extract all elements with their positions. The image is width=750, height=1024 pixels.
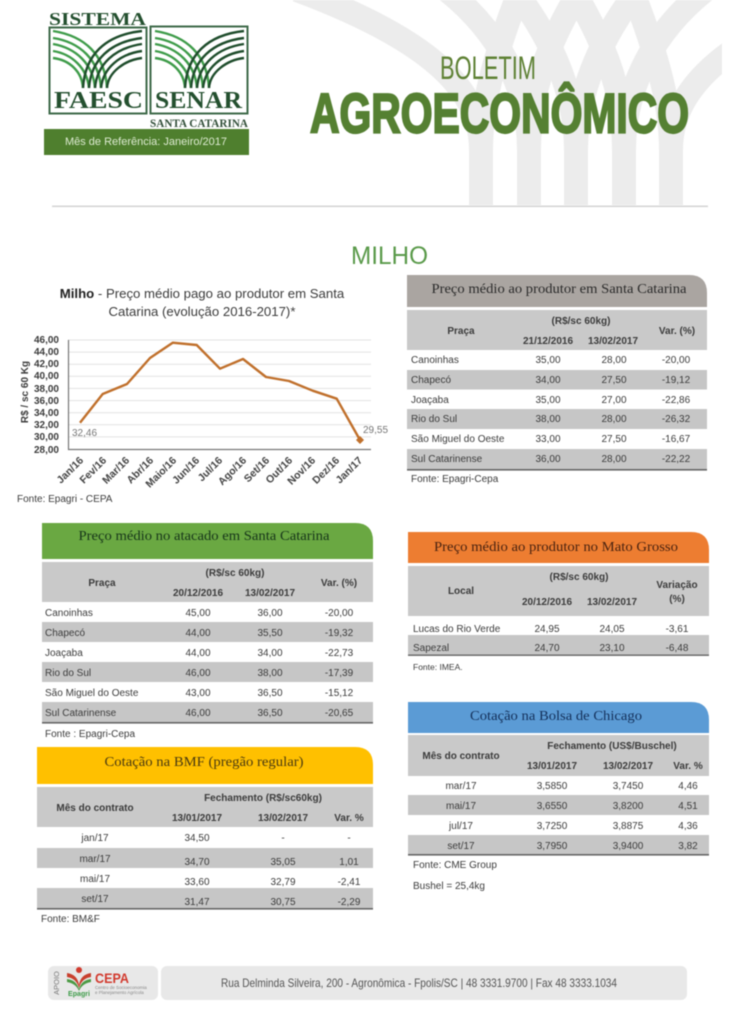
table rows: 31,47	[184, 897, 210, 908]
table rows: 36,00	[535, 454, 561, 465]
panel: Preço médio no atacado em Santa Catarina	[42, 523, 373, 740]
table rows: São Miguel do Oeste	[411, 434, 505, 445]
table rows: -16,67	[662, 434, 691, 445]
table head row: 13/02/2017	[603, 761, 653, 772]
table heading	[42, 523, 373, 559]
panel: Cotação na BMF	[37, 747, 373, 925]
table rows: 1,01	[339, 857, 359, 868]
table head row: Mês do contrato	[422, 751, 500, 762]
table rows: 3,6550	[537, 801, 568, 812]
icon: Epagri mark	[67, 967, 91, 991]
chart source: Fonte: Epagri - CEPA	[17, 494, 113, 505]
table head row: Fechamento (R$/sc60kg)	[204, 793, 322, 804]
table rows: -	[347, 833, 351, 844]
table rows: 4,51	[678, 801, 698, 812]
footer logo panel: CEPA	[95, 970, 129, 986]
table rows: 27,50	[601, 375, 627, 386]
panel: Preço médio ao produtor em Santa Catarina	[407, 275, 707, 485]
table rows: Joaçaba	[45, 648, 83, 659]
table head row: Var. (%)	[321, 578, 357, 589]
table rows: 43,00	[185, 688, 211, 699]
table rows: 34,50	[184, 833, 210, 844]
y axis labels: 42,00	[34, 359, 59, 370]
logo: Sistema FAESC SENAR	[49, 9, 249, 130]
x axis labels: Jun/16	[170, 455, 202, 487]
table heading	[408, 702, 709, 733]
table rows: 38,00	[257, 668, 283, 679]
table rows: 23,10	[599, 643, 625, 654]
table rows: -15,12	[325, 688, 354, 699]
x axis labels: Abr/16	[125, 455, 156, 486]
chart title: Milho - Preço médio pago ao produtor em Santa	[60, 286, 345, 301]
x axis labels: Ago/16	[216, 455, 249, 488]
x axis labels: Fev/16	[78, 455, 109, 486]
y axis labels	[34, 335, 59, 456]
table rows: 24,05	[599, 624, 625, 635]
footer logo panel: e Planejamento Agrícola	[95, 990, 144, 995]
table rows: 35,00	[535, 355, 561, 366]
table rows: Joaçaba	[411, 395, 449, 406]
y axis labels: 46,00	[34, 335, 59, 346]
footer logo panel: Centro de Socioeconomia	[95, 985, 147, 990]
data labels: 32,46	[72, 428, 97, 439]
table rows: set/17	[447, 841, 475, 852]
table head row: 21/12/2016	[523, 336, 573, 347]
table rows: Rio do Sul	[411, 414, 457, 425]
data labels	[72, 425, 388, 439]
table head row: (R$/sc 60kg)	[206, 568, 264, 579]
logo box: SENAR	[150, 26, 248, 114]
table rows	[408, 624, 709, 656]
table head row: 13/02/2017	[258, 813, 308, 824]
reference month bar: Mês de Referência: Janeiro/2017	[65, 136, 227, 148]
table rows	[407, 355, 707, 471]
table rows: set/17	[81, 894, 109, 905]
logo box: FAESC	[50, 28, 146, 114]
table rows: 36,00	[257, 608, 283, 619]
y axis labels: 32,00	[34, 420, 59, 431]
x axis labels: Set/16	[242, 455, 272, 485]
table rows: 44,00	[185, 628, 211, 639]
table rows: São Miguel do Oeste	[45, 688, 139, 699]
table rows: -26,32	[662, 414, 691, 425]
table rows: mar/17	[79, 854, 111, 865]
table rows: 3,8200	[613, 801, 644, 812]
bushel note: Bushel = 25,4kg	[413, 881, 485, 892]
table head row: Var. (%)	[659, 326, 695, 337]
table head row: Fechamento (US$/Buschel)	[547, 741, 677, 752]
table head row: 20/12/2016	[173, 588, 223, 599]
table heading	[408, 532, 709, 563]
table rows: 24,95	[534, 624, 560, 635]
table rows: 28,00	[601, 414, 627, 425]
table rows: Canoinhas	[45, 608, 93, 619]
x axis labels: Jan/17	[334, 455, 365, 486]
table head row: Mês do contrato	[56, 803, 134, 814]
logo box: SENAR: SENAR	[155, 88, 243, 114]
table rows: Rio do Sul	[45, 668, 91, 679]
table rows: 45,00	[185, 608, 211, 619]
table rows: -19,32	[325, 628, 354, 639]
table heading: Preço médio ao produtor em Santa Catarina	[432, 282, 687, 297]
footer address panel: Rua Delminda Silveira, 200 - Agronômica - Fpolis/SC | 48 3331.9700 | Fax 48 3333.1034	[221, 976, 617, 990]
table head row: Local	[448, 586, 474, 597]
table rows	[408, 781, 709, 856]
y axis labels: 40,00	[34, 371, 59, 382]
x axis labels: Jul/16	[196, 455, 225, 484]
end marker	[356, 436, 364, 444]
table rows: 3,7250	[537, 821, 568, 832]
table rows: Chapecó	[411, 375, 451, 386]
table rows: mai/17	[446, 801, 476, 812]
table rows: 35,50	[257, 628, 283, 639]
table head row	[407, 310, 707, 350]
table rows: mar/17	[445, 781, 477, 792]
table rows	[37, 833, 373, 910]
table rows: -20,00	[325, 608, 354, 619]
chart title	[60, 286, 345, 319]
table rows: 34,70	[184, 857, 210, 868]
x axis labels: Dez/16	[310, 455, 342, 487]
table heading: Cotação na BMF (pregão regular)	[104, 755, 304, 770]
footer	[48, 966, 687, 1000]
data labels: 29,55	[363, 425, 388, 436]
table rows: mai/17	[80, 874, 110, 885]
table head row: 13/02/2017	[588, 336, 638, 347]
table rows: 27,50	[601, 434, 627, 445]
table head row: (R$/sc 60kg)	[552, 316, 610, 327]
table rows: jan/17	[80, 833, 109, 844]
chart title: Catarina (evolução 2016-2017)*	[109, 304, 295, 319]
table rows: -22,86	[662, 395, 691, 406]
y axis title: R$ / sc 60 Kg	[20, 361, 31, 423]
table rows	[42, 608, 373, 724]
table source: Fonte: BM&F	[41, 914, 100, 925]
footer address panel	[161, 966, 687, 1000]
table head row: 20/12/2016	[522, 597, 572, 608]
table head row: Var. %	[334, 813, 364, 824]
table rows: 44,00	[185, 648, 211, 659]
table rows: Sul Catarinense	[45, 708, 117, 719]
price line	[80, 343, 360, 440]
table head row: 13/02/2017	[245, 588, 295, 599]
y axis labels: 36,00	[34, 396, 59, 407]
table rows: -22,73	[325, 648, 354, 659]
table rows: 35,00	[535, 395, 561, 406]
table rows: 4,36	[678, 821, 698, 832]
table head row: 13/01/2017	[172, 813, 222, 824]
footer logo panel: Epagri	[68, 991, 90, 998]
table rows: 3,9400	[613, 841, 644, 852]
table rows: -19,12	[662, 375, 691, 386]
table head row: Variação	[656, 580, 698, 591]
x axis labels	[55, 455, 365, 490]
table rows: 34,00	[257, 648, 283, 659]
table rows: -17,39	[325, 668, 354, 679]
footer logo panel: APOIO	[52, 971, 61, 995]
footer logo panel	[48, 966, 158, 1000]
table rows: 30,75	[270, 897, 296, 908]
table rows: 3,82	[678, 841, 698, 852]
x axis labels: Mar/16	[100, 455, 132, 487]
x axis labels: Jan/16	[55, 455, 86, 486]
y axis labels: 44,00	[34, 347, 59, 358]
table head row: (R$/sc 60kg)	[550, 572, 608, 583]
table rows: 3,5850	[537, 781, 568, 792]
table rows: 28,00	[601, 355, 627, 366]
reference month bar	[44, 129, 249, 155]
table rows: 33,60	[184, 877, 210, 888]
table heading	[37, 747, 373, 784]
table head row	[37, 787, 373, 827]
table rows: 32,79	[270, 877, 296, 888]
panel: line chart of corn price	[17, 286, 388, 505]
table heading	[407, 275, 707, 307]
table heading: Preço médio ao produtor no Mato Grosso	[434, 540, 678, 555]
table rows: 27,00	[601, 395, 627, 406]
x axis labels: Out/16	[264, 455, 295, 486]
x axis labels: Nov/16	[285, 455, 318, 487]
table rows: Sapezal	[413, 643, 449, 654]
table rows: 36,50	[257, 708, 283, 719]
table source: Fonte: Epagri-Cepa	[411, 474, 499, 485]
table rows: 35,05	[270, 857, 296, 868]
table head row	[408, 735, 709, 776]
table rows: 3,8875	[613, 821, 644, 832]
table rows: 38,00	[535, 414, 561, 425]
logo text: Santa Catarina: SANTA CATARINA	[150, 118, 249, 130]
table head row: Var. %	[673, 761, 703, 772]
table source: Fonte : Epagri-Cepa	[45, 729, 135, 740]
table head row: 13/02/2017	[587, 597, 637, 608]
table rows: -2,29	[338, 897, 361, 908]
table head row: Praça	[447, 326, 475, 337]
table rows: 33,00	[535, 434, 561, 445]
table rows: 4,46	[678, 781, 698, 792]
table head row: 13/01/2017	[527, 761, 577, 772]
y axis labels: 34,00	[34, 408, 59, 419]
table head row	[408, 566, 709, 616]
table rows: -6,48	[666, 643, 689, 654]
table rows: 46,00	[185, 668, 211, 679]
table heading: Cotação na Bolsa de Chicago	[470, 709, 642, 724]
table heading: Preço médio no atacado em Santa Catarina	[78, 529, 330, 544]
table rows: -2,41	[338, 877, 361, 888]
table head row: (%)	[669, 594, 685, 605]
table rows: -3,61	[666, 624, 689, 635]
table rows: Lucas do Rio Verde	[413, 624, 501, 635]
table rows: -	[281, 833, 285, 844]
table head row	[42, 562, 373, 602]
title: Boletim: BOLETIM	[440, 50, 536, 86]
heading: Milho: MILHO	[351, 242, 428, 270]
y axis labels: 30,00	[34, 432, 59, 443]
table rows: 3,7450	[613, 781, 644, 792]
table source: Fonte: IMEA.	[413, 662, 463, 672]
logo box: FAESC: FAESC	[54, 88, 143, 114]
table head row: Praça	[88, 578, 116, 589]
table rows: jul/17	[448, 821, 473, 832]
table rows: Canoinhas	[411, 355, 459, 366]
y axis labels: 38,00	[34, 384, 59, 395]
table rows: -20,65	[325, 708, 354, 719]
y axis labels: 28,00	[34, 445, 59, 456]
panel: Cotação na Bolsa de Chicago	[408, 702, 709, 892]
watermark: leaf pattern	[297, 0, 750, 205]
table rows: 3,7950	[537, 841, 568, 852]
logo text: Sistema: SISTEMA	[49, 9, 146, 29]
panel: Preço médio ao produtor no Mato Grosso	[408, 532, 709, 672]
table source: Fonte: CME Group	[413, 860, 497, 871]
table rows: -22,22	[662, 454, 691, 465]
table rows: Chapecó	[45, 628, 85, 639]
table rows: -20,00	[662, 355, 691, 366]
table rows: 28,00	[601, 454, 627, 465]
table rows: 34,00	[535, 375, 561, 386]
table rows: 46,00	[185, 708, 211, 719]
table rows: 36,50	[257, 688, 283, 699]
table rows: 24,70	[534, 643, 560, 654]
table rows: Sul Catarinense	[411, 454, 483, 465]
x axis labels: Maio/16	[143, 455, 179, 490]
